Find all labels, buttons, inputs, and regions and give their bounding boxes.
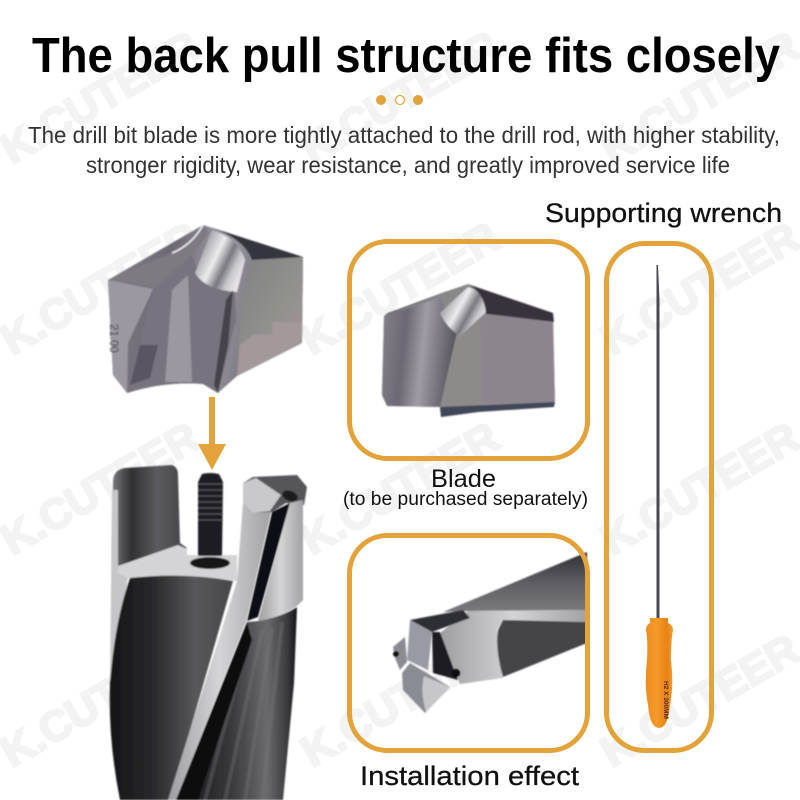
image: assembled drill xyxy=(393,552,587,713)
panel: blade xyxy=(350,242,588,458)
watermark pattern: K.CUTEER xyxy=(293,22,507,174)
left edge strip xyxy=(110,490,128,683)
right land xyxy=(258,500,303,621)
image: blade insert xyxy=(382,284,555,417)
dark flute right xyxy=(176,607,297,800)
arrow xyxy=(198,397,226,470)
size marking: 21.00 xyxy=(107,324,119,353)
description text: stronger rigidity, wear resistance, and greatly improved service life xyxy=(86,152,730,178)
icon: wrench xyxy=(646,265,673,728)
image: top blade insert xyxy=(107,225,303,393)
base plate xyxy=(118,545,237,581)
dark flute left xyxy=(110,576,233,800)
label: blade: (to be purchased separately) xyxy=(343,489,588,510)
wrench shaft xyxy=(656,265,660,620)
decorative dots xyxy=(376,95,423,105)
handle marking: H2 X 300MM xyxy=(662,681,669,719)
image: drill body with screw xyxy=(110,465,307,800)
label: blade: Blade xyxy=(431,465,496,493)
right support fin xyxy=(243,475,307,513)
watermark pattern: K.CUTEER xyxy=(293,413,507,565)
locating screw xyxy=(190,473,230,569)
flute fan lines xyxy=(205,622,282,800)
heading: supporting wrench: Supporting wrench xyxy=(545,198,782,228)
label: blade xyxy=(343,465,588,510)
watermark pattern: K.CUTEER xyxy=(293,213,507,365)
left support fin xyxy=(113,465,187,575)
screw access hole xyxy=(281,489,299,503)
label: installation effect: Installation effect xyxy=(360,761,580,791)
frame xyxy=(350,536,588,750)
flute shadow edge xyxy=(176,622,252,800)
black groove xyxy=(247,503,290,621)
wrench handle xyxy=(646,618,673,728)
silver diagonal land xyxy=(168,503,271,800)
panel: supporting wrench xyxy=(606,244,712,750)
description text xyxy=(28,122,780,178)
description text: The drill bit blade is more tightly attached to the drill rod, with higher stability, xyxy=(28,122,780,148)
frame xyxy=(350,242,588,458)
panel: installation effect xyxy=(350,536,588,750)
watermark pattern: K.CUTEER xyxy=(293,625,507,777)
